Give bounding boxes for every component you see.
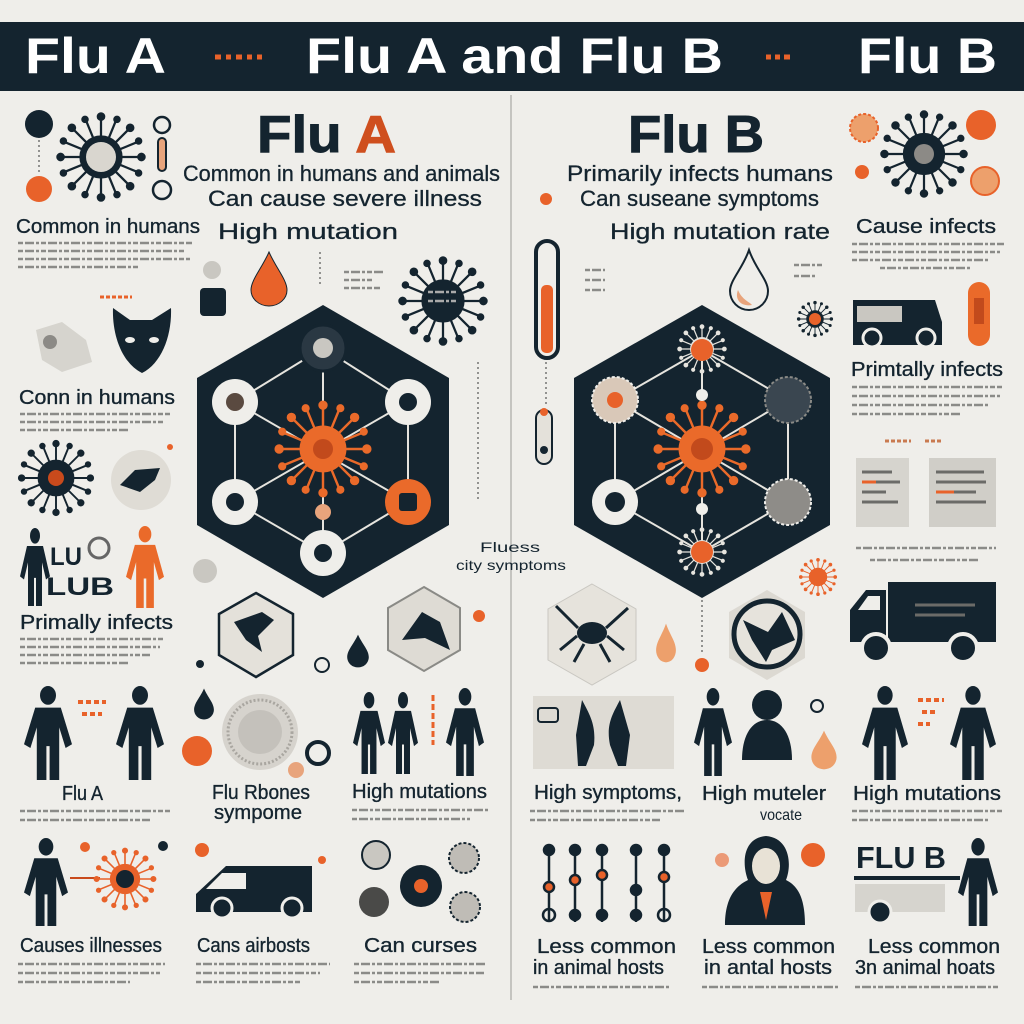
icon: circle with animal — [111, 444, 173, 510]
icon: virus top right of Flu A — [399, 257, 487, 345]
text block: primarily infects — [20, 612, 173, 663]
text block: Flu B summary — [567, 161, 833, 244]
text block: Flu A: Flu A — [62, 783, 104, 805]
node icons — [592, 325, 811, 576]
icon: pale drop — [730, 250, 822, 310]
text block: less common: Less common — [537, 936, 676, 958]
text block: common in humans — [16, 216, 200, 267]
row: bottom Flu B — [533, 836, 1000, 987]
text block: flu symptoms: Flu Rbones — [212, 782, 310, 804]
text block: less common — [533, 936, 676, 987]
icon: FLU B label, van and person — [854, 838, 998, 926]
text block: Flu B summary: Primarily infects humans — [567, 161, 833, 186]
icon: central virus — [276, 402, 370, 496]
text block: Flu A summary: Can cause severe illness — [208, 186, 482, 211]
icon: vertical chain dials — [543, 845, 670, 922]
icon: three people — [353, 688, 484, 776]
node icons — [212, 325, 431, 576]
heading: Flu B: Flu B — [628, 106, 764, 164]
icon: small virus — [797, 301, 833, 337]
icon: people with flu labels: LUB — [46, 573, 114, 601]
text block: high symptoms — [530, 782, 684, 820]
text block: center note: city symptoms — [456, 557, 566, 573]
hexagon badges row — [193, 559, 485, 677]
text block: primarily infects — [851, 359, 1003, 414]
text block: cause infects: Cause infects — [856, 216, 996, 238]
text block: high mutations: High mutations — [352, 781, 487, 803]
header banner — [0, 22, 1024, 91]
icon: van and capsule — [853, 282, 990, 347]
text block: Flu A summary: High mutation — [218, 219, 398, 244]
text block: center note — [456, 539, 566, 573]
charts: two report cards — [856, 441, 996, 560]
icon: FLU B label, van and person: FLU B — [856, 840, 946, 875]
header banner: Flu A — [25, 28, 166, 84]
icon: two people — [24, 686, 164, 780]
hexagon diagram: Flu B — [574, 305, 830, 598]
text block: high symptoms: High symptoms, — [534, 782, 682, 804]
row: bottom Flu A — [18, 838, 486, 982]
icon: orange virus small — [799, 558, 837, 596]
text block: primarily infects: Primally infects — [20, 612, 173, 634]
text block: less common — [702, 936, 838, 987]
icon: dotted sphere — [182, 689, 329, 778]
text block: Flu A summary — [183, 161, 500, 244]
text block: less common: in animal hosts — [533, 957, 664, 979]
text block: high mutations — [852, 783, 1002, 820]
icon: crab pathogen hexagon — [548, 584, 636, 685]
icon: small badges top left — [25, 110, 171, 202]
text block: Flu B summary: Can suseane symptoms — [580, 186, 819, 211]
icon: thermometer dotted column — [477, 362, 479, 500]
icon: circular animal badge — [729, 590, 805, 680]
icon: people with hoodie and drop — [694, 688, 837, 776]
icon: thermometer — [536, 193, 605, 464]
text block: center note: Fluess — [480, 539, 540, 555]
text block: less common: 3n animal hoats — [855, 957, 995, 979]
text block: can curses: Can curses — [364, 935, 477, 957]
icon: dark mask — [113, 308, 171, 373]
icon: person and virus — [24, 838, 168, 926]
text block: can curses — [354, 935, 486, 982]
text block: flu symptoms — [212, 782, 310, 824]
header banner: Flu B — [858, 28, 997, 84]
text block: flu symptoms: sympome — [214, 802, 302, 824]
row: people and labels Flu A — [20, 686, 488, 824]
icon: drop and dot — [656, 600, 709, 672]
heading: Flu A: Flu A — [257, 106, 396, 164]
text block: conn in humans: Conn in humans — [19, 387, 175, 409]
text block: causes illnesses — [18, 935, 165, 982]
icons around hexagon top — [200, 252, 384, 316]
panel: Flu A — [16, 106, 566, 982]
text block: high mutations: High mutations — [853, 783, 1001, 805]
text block: less common: Less common — [868, 936, 1000, 958]
row: people and labels Flu B — [530, 686, 1002, 824]
icon: virus top left — [57, 113, 145, 201]
center divider — [510, 95, 512, 1000]
icon: animal sketch — [36, 297, 132, 372]
text block: cans airborne — [196, 935, 330, 982]
text block: high mutation: vocate — [760, 807, 802, 824]
icon: silhouettes card — [533, 696, 674, 769]
text block: Flu A — [20, 783, 170, 820]
text block: high mutation — [702, 783, 826, 824]
text block: less common — [855, 936, 1000, 987]
text block: cans airborne: Cans airbosts — [197, 935, 310, 957]
text block: primarily infects: Primtally infects — [851, 359, 1003, 381]
text block: cause infects — [852, 216, 1004, 268]
header banner: Flu A and Flu B — [306, 28, 723, 84]
text block: high mutation: High muteler — [702, 783, 826, 805]
icon: virus top right — [881, 111, 967, 197]
text block: high mutations — [352, 781, 488, 819]
text block: Flu A summary: Common in humans and animals — [183, 161, 500, 186]
icon: people with flu labels — [20, 526, 164, 608]
icon: virus cluster — [359, 841, 480, 922]
panel: Flu B — [530, 106, 1004, 987]
hexagon diagram: Flu A — [197, 305, 449, 598]
icon: hooded person — [715, 836, 825, 925]
icon: top right badges — [850, 110, 999, 195]
text block: Flu B summary: High mutation rate — [610, 219, 830, 244]
text block: causes illnesses: Causes illnesses — [20, 935, 162, 957]
icon: people with flu labels: LU — [50, 543, 82, 571]
icon: two people — [862, 686, 996, 780]
text block: less common: in antal hosts — [704, 957, 832, 979]
icon: virus small left — [19, 441, 93, 515]
icon: van — [195, 843, 326, 918]
icon: delivery truck — [850, 582, 996, 662]
text block: less common: Less common — [702, 936, 835, 958]
text block: common in humans: Common in humans — [16, 216, 200, 238]
icon: central virus — [655, 402, 749, 496]
text block: conn in humans — [19, 387, 175, 430]
